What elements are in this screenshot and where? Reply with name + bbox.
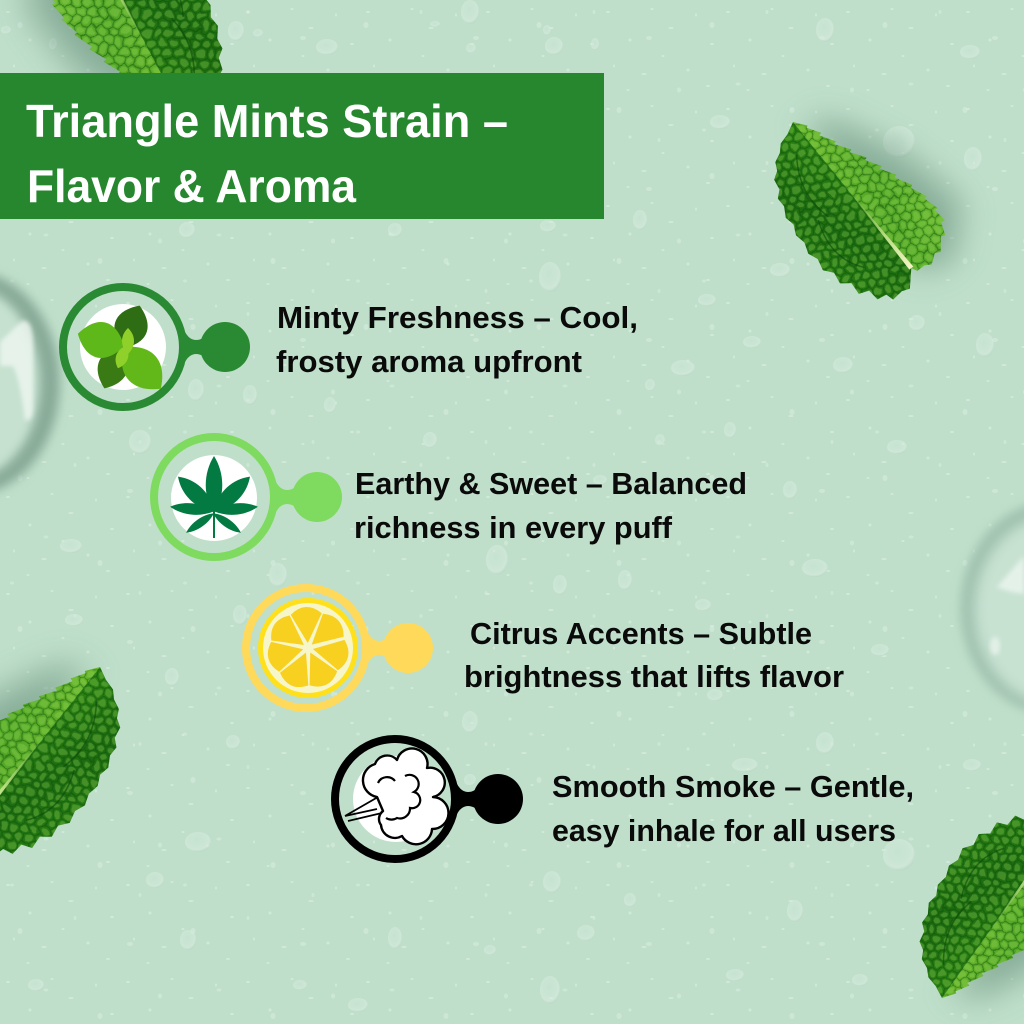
- icon: smoke puff: [335, 739, 523, 859]
- text: citrus accents: [464, 616, 844, 694]
- text: smooth smoke: easy inhale for all users: [552, 813, 896, 848]
- title: Triangle Mints Strain –: [26, 95, 508, 147]
- icon: cannabis leaf: [154, 437, 342, 557]
- icon: lemon slice: [246, 588, 433, 708]
- item: smooth smoke: [335, 739, 914, 859]
- item: citrus accents: [246, 588, 844, 708]
- text: earthy and sweet: Earthy & Sweet – Balanced: [355, 466, 747, 501]
- big water drop left: [0, 271, 60, 495]
- title: [26, 95, 508, 212]
- mint leaf top: [4, 0, 259, 169]
- text: minty freshness: [276, 300, 638, 379]
- text: minty freshness: frosty aroma upfront: [276, 344, 582, 379]
- text: citrus accents: brightness that lifts flavor: [464, 659, 844, 694]
- mint leaf upper right: [738, 72, 987, 330]
- text: smooth smoke: [552, 769, 914, 848]
- item: minty freshness: [63, 287, 638, 407]
- text: earthy and sweet: [354, 466, 747, 545]
- icon: mint sprig: [63, 287, 250, 407]
- mint leaf lower left: [0, 615, 158, 886]
- big water drop right: [961, 502, 1024, 714]
- item: earthy and sweet: [154, 437, 747, 557]
- text: citrus accents: Citrus Accents – Subtle: [470, 616, 812, 651]
- mint leaf lower right: [884, 786, 1024, 1024]
- text: minty freshness: Minty Freshness – Cool,: [277, 300, 638, 335]
- title banner: [0, 73, 604, 219]
- text: smooth smoke: Smooth Smoke – Gentle,: [552, 769, 914, 804]
- title: Flavor & Aroma: [27, 160, 356, 212]
- text: earthy and sweet: richness in every puff: [354, 510, 673, 545]
